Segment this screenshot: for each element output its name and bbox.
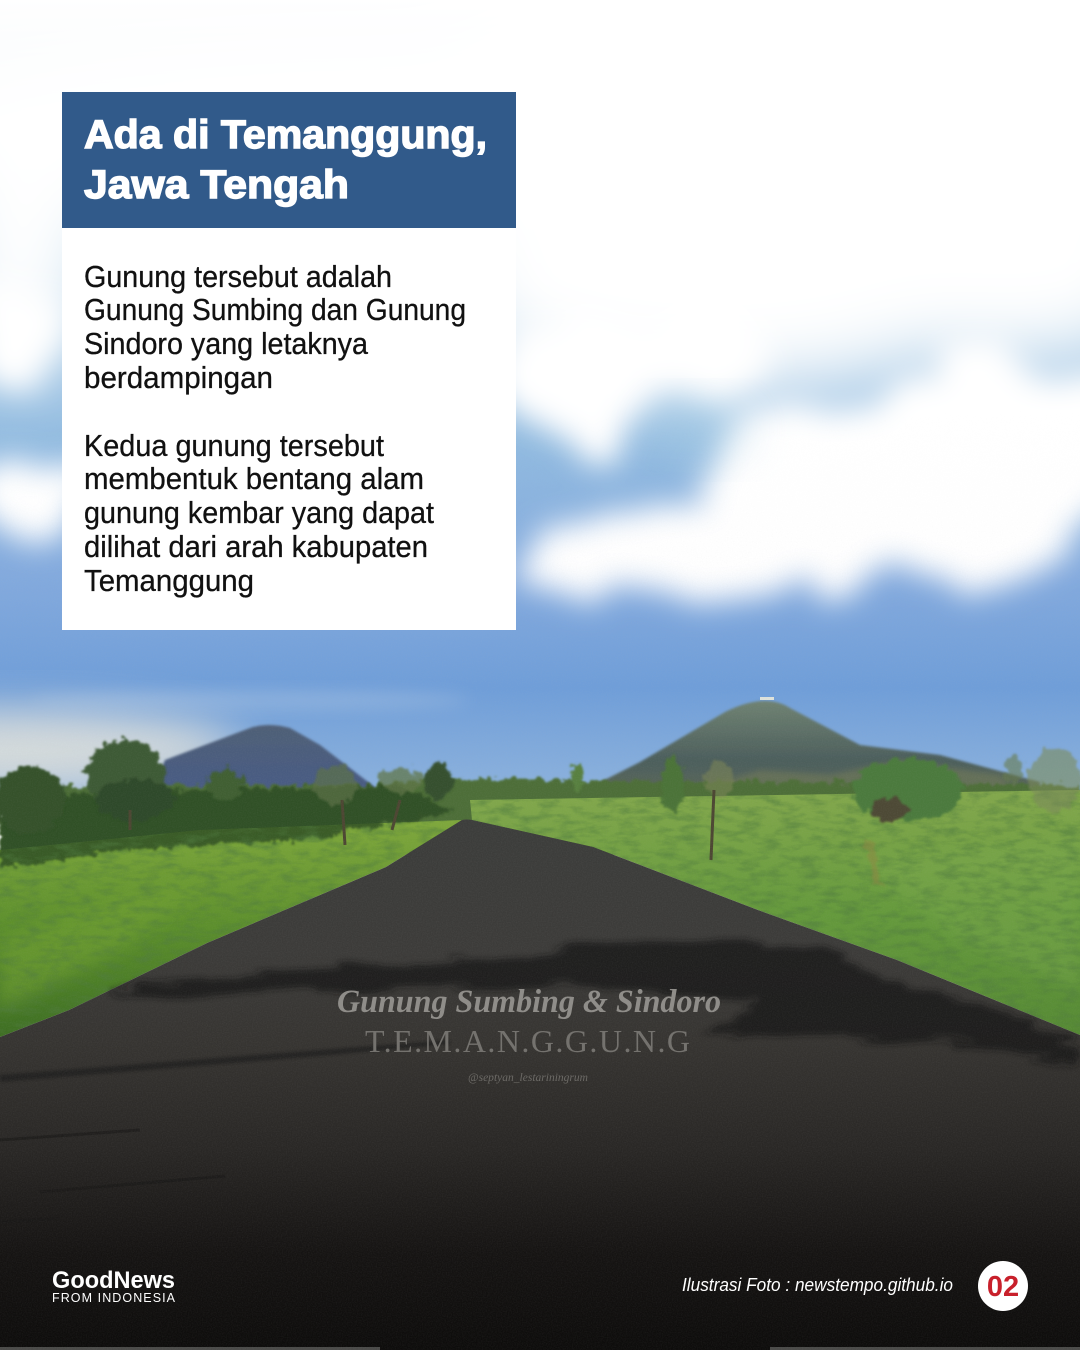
- paragraph 2: Temanggung: [84, 563, 254, 598]
- paragraph 1: [84, 259, 466, 395]
- paragraph 1: Sindoro yang letaknya: [84, 326, 369, 361]
- paragraph 1: berdampingan: [84, 360, 273, 395]
- watermark credit: @septyan_lestariningrum: [468, 1070, 588, 1084]
- green fields: [0, 778, 1080, 1050]
- mountain: Gunung Sumbing: [575, 697, 1040, 800]
- heading: Ada di Temanggung,: [84, 113, 487, 157]
- paragraph 2: gunung kembar yang dapat: [84, 495, 434, 530]
- page number badge: [978, 1261, 1028, 1311]
- background photo: sky with clouds: [0, 0, 1080, 800]
- panel: text card: [62, 92, 516, 630]
- page number badge: 02: [987, 1271, 1019, 1303]
- logo: GoodNews from Indonesia: FROM INDONESIA: [52, 1291, 176, 1305]
- heading: [84, 113, 487, 207]
- logo: GoodNews from Indonesia: GoodNews: [52, 1267, 175, 1294]
- mountain: Gunung Sindoro: [150, 725, 385, 795]
- watermark place name: T.E.M.A.N.G.G.U.N.G: [365, 1023, 690, 1059]
- paragraph 1: Gunung tersebut adalah: [84, 259, 392, 294]
- trees: [0, 740, 1080, 885]
- paragraph 2: Kedua gunung tersebut: [84, 428, 384, 463]
- photo watermark: [337, 984, 721, 1084]
- asphalt road: [0, 820, 1080, 1350]
- tree trunks: [130, 790, 714, 860]
- paragraph 2: dilihat dari arah kabupaten: [84, 529, 428, 564]
- panel background: [62, 228, 516, 630]
- photo grain: [0, 771, 1080, 1350]
- paragraph 1: Gunung Sumbing dan Gunung: [84, 292, 466, 327]
- heading band: [62, 92, 516, 228]
- photo credit: Ilustrasi Foto : newstempo.github.io: [682, 1275, 953, 1295]
- paragraph 2: membentuk bentang alam: [84, 461, 424, 496]
- watermark script title: Gunung Sumbing & Sindoro: [337, 984, 721, 1020]
- heading: Jawa Tengah: [84, 163, 349, 207]
- paragraph 2: [84, 428, 434, 598]
